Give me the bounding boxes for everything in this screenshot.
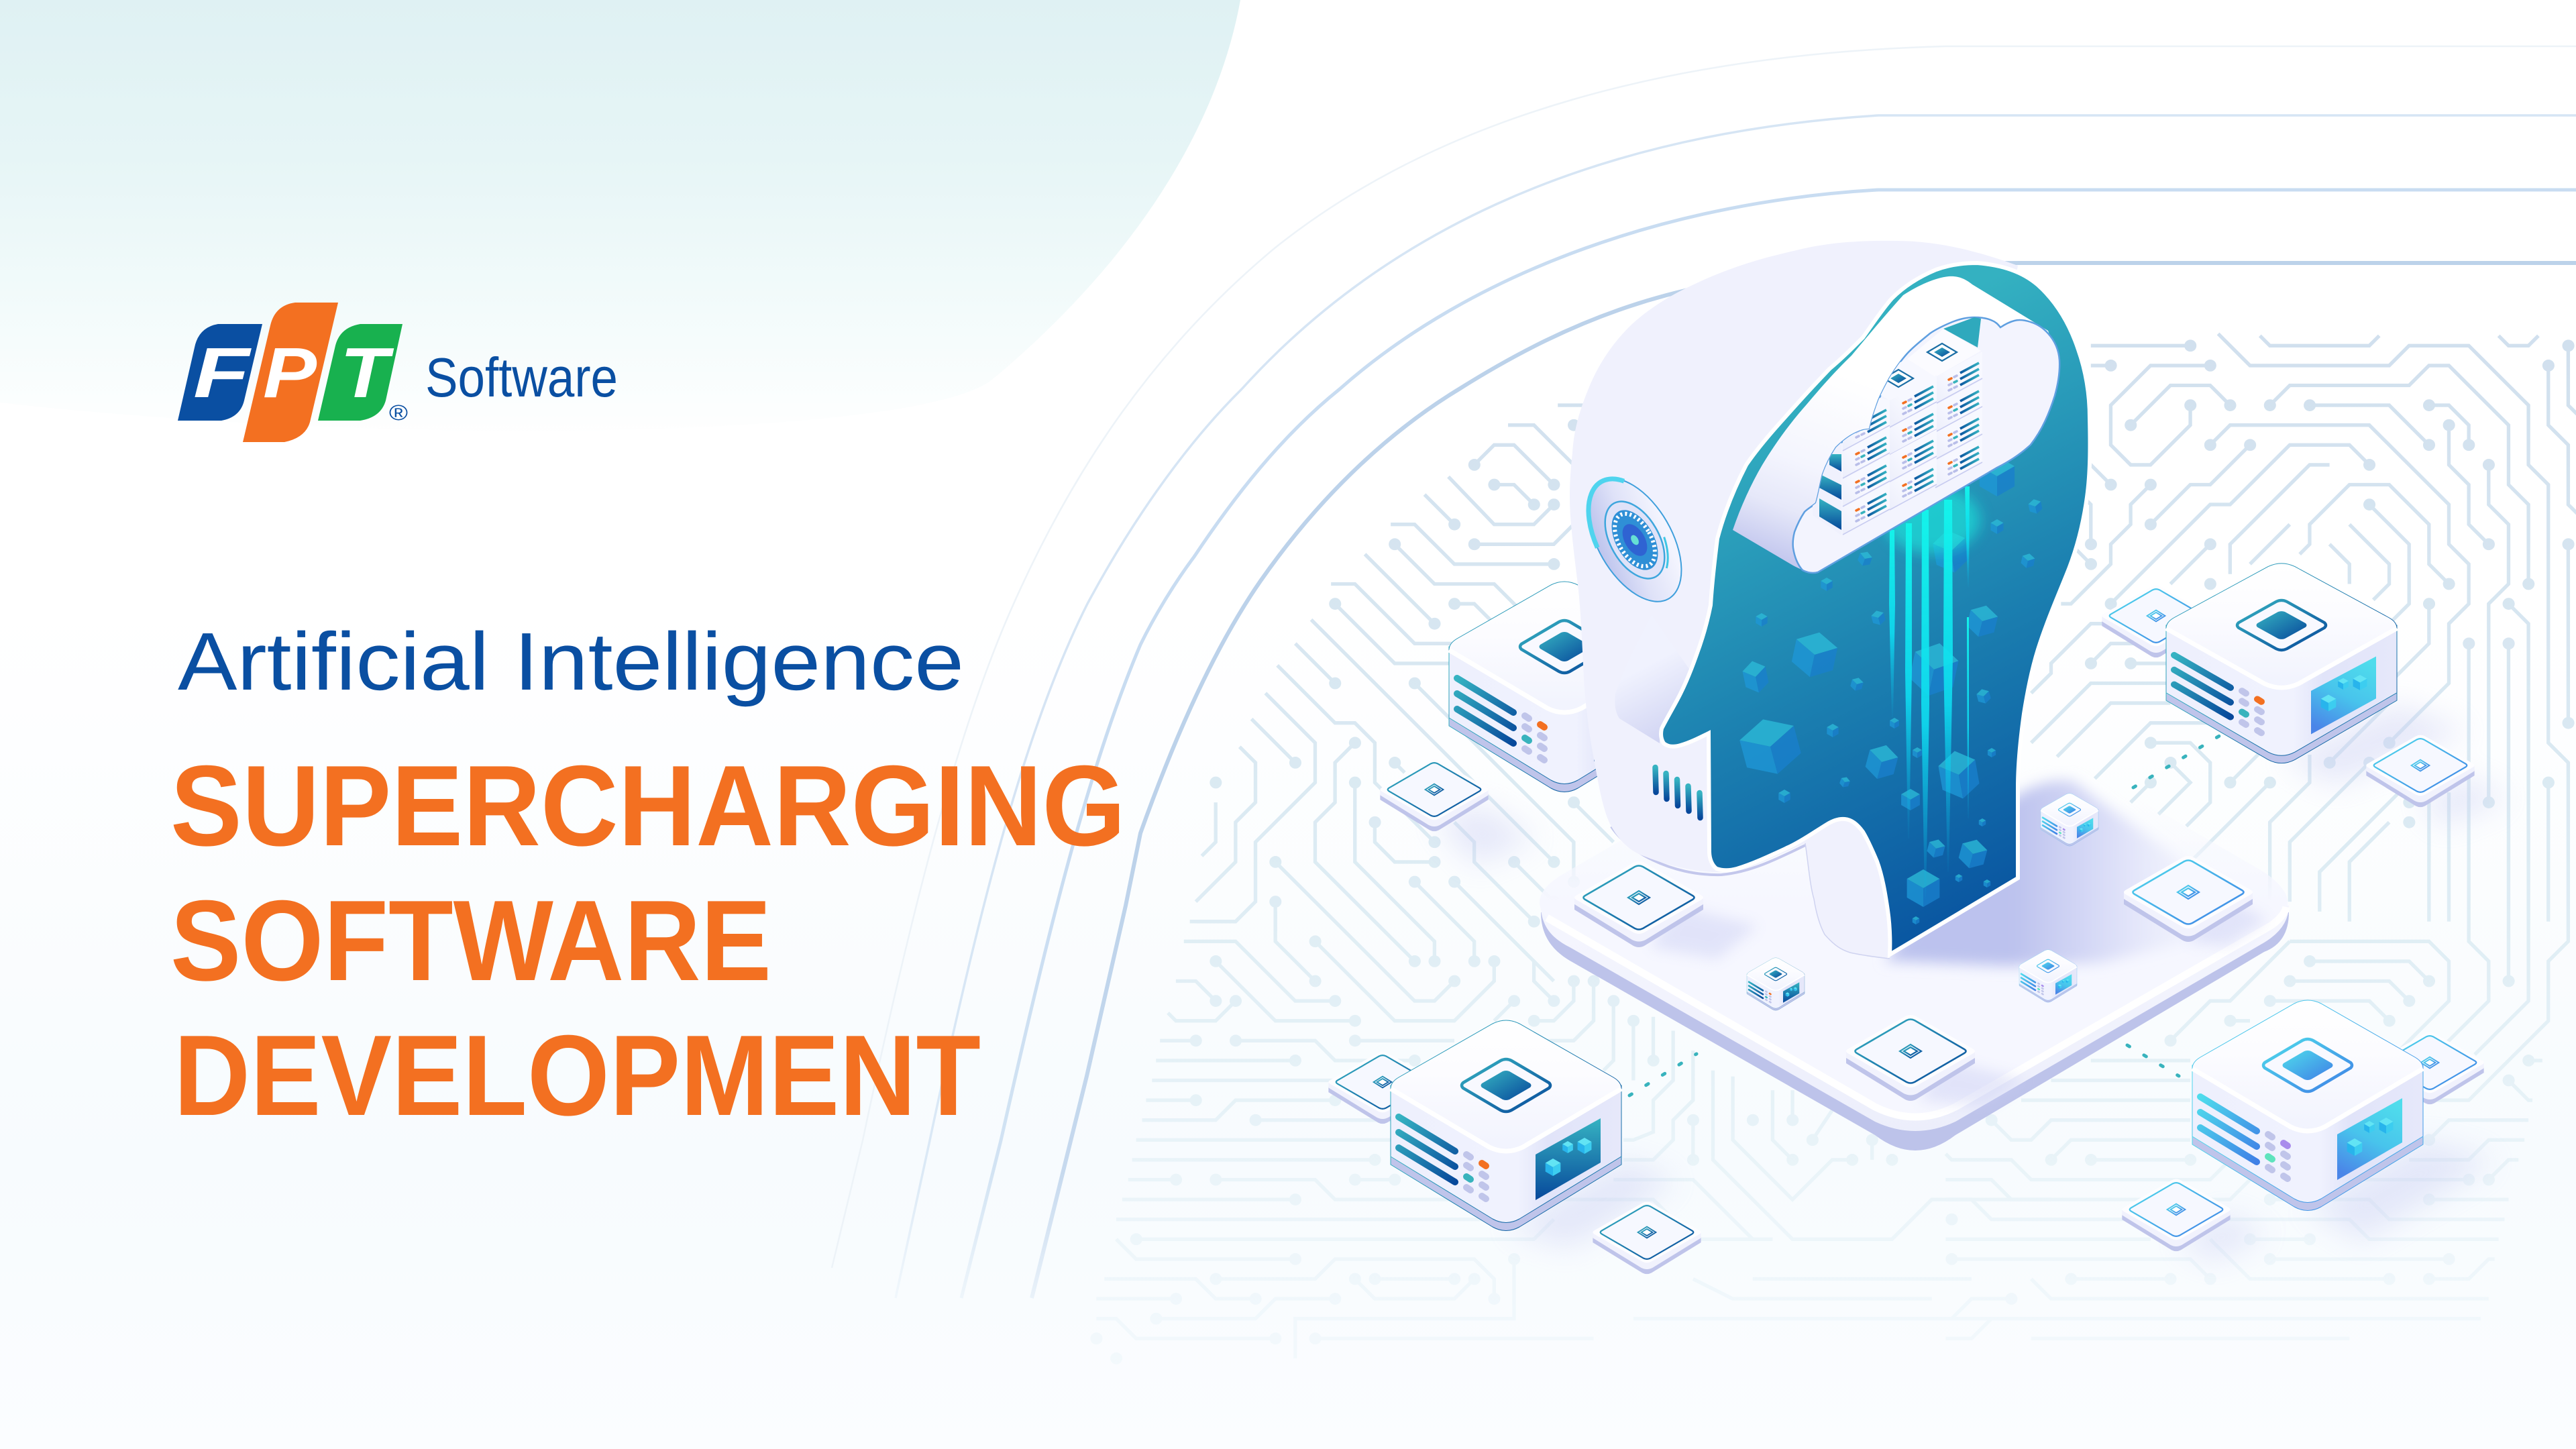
dashed links between servers bbox=[1629, 735, 2220, 1095]
light beams bbox=[1884, 486, 1980, 899]
isometric platform bbox=[1540, 683, 2289, 1150]
server: upper right bbox=[2166, 564, 2397, 763]
mini server: platform right bbox=[2019, 950, 2077, 1002]
chip tile: lower right front bbox=[2122, 1179, 2231, 1251]
chip tile: lower right back bbox=[2375, 1032, 2484, 1104]
chip tile: platform left bbox=[1574, 861, 1703, 947]
concentric arc lines bbox=[832, 46, 2576, 1298]
cheek crease bbox=[1615, 615, 1690, 743]
chip tile: upper right back bbox=[2102, 586, 2210, 657]
chip tile: lower left back bbox=[1328, 1052, 1437, 1124]
middle column bbox=[1890, 375, 1937, 510]
platform tile shadows bbox=[1650, 899, 2267, 1107]
logo panel: green T: T bbox=[340, 333, 394, 413]
circuit board traces bbox=[1096, 334, 2576, 1358]
floating cubes bbox=[1736, 456, 2043, 924]
neck contour bbox=[1805, 843, 1890, 959]
main title: DEVELOPMENT bbox=[174, 1012, 981, 1140]
teal corner blob bbox=[0, 0, 1240, 431]
server: behind head, left bbox=[1449, 582, 1680, 792]
main title: SUPERCHARGING bbox=[170, 742, 1126, 870]
jaw underside line bbox=[1611, 826, 1805, 875]
head cast shadow on platform bbox=[1885, 781, 2234, 966]
logo panel: orange P: P bbox=[263, 333, 317, 413]
server: lower right bbox=[2192, 1000, 2423, 1210]
server: lower left bbox=[1391, 1020, 1621, 1230]
teal gap behind servers bbox=[1943, 317, 1981, 347]
AI head bbox=[1569, 241, 2090, 959]
right column bbox=[1935, 352, 1982, 488]
chip tile: right bbox=[2366, 735, 2475, 807]
chip tile: lower centre-left bbox=[1593, 1202, 1701, 1274]
subtitle: Artificial Intelligence bbox=[178, 616, 964, 707]
soft shadows under outer devices bbox=[1434, 704, 2509, 1261]
logo panel: blue F bbox=[178, 324, 262, 421]
registered mark: ® bbox=[389, 400, 409, 425]
face cross-section bbox=[1661, 263, 2090, 955]
chip tile: platform right bbox=[2124, 856, 2253, 942]
stack top faces bbox=[1876, 329, 1958, 407]
cloud cut-away rim bbox=[1733, 276, 2059, 572]
mouth grill vents bbox=[1656, 767, 1700, 818]
logo panel: orange P bbox=[243, 303, 338, 442]
mini server: by the neck bbox=[2041, 794, 2098, 846]
cloud window bbox=[1793, 317, 2059, 573]
left column side panels bbox=[1813, 443, 1841, 530]
logo wordmark: Software bbox=[425, 346, 618, 409]
main title bbox=[170, 742, 1126, 1140]
mini server: platform left bbox=[1747, 958, 1805, 1010]
logo: FPT Software bbox=[178, 303, 618, 442]
chip tile: platform front bbox=[1846, 1015, 1975, 1101]
left column bbox=[1843, 398, 1890, 535]
chip tile: far left bbox=[1380, 759, 1489, 831]
logo panel: green T bbox=[318, 324, 402, 421]
head shell bbox=[1570, 241, 2018, 959]
logo panel: blue F: F bbox=[193, 333, 252, 413]
main title: SOFTWARE bbox=[170, 877, 771, 1005]
eye sensor bbox=[1569, 463, 1701, 617]
cloud server stacks bbox=[1813, 317, 1982, 535]
